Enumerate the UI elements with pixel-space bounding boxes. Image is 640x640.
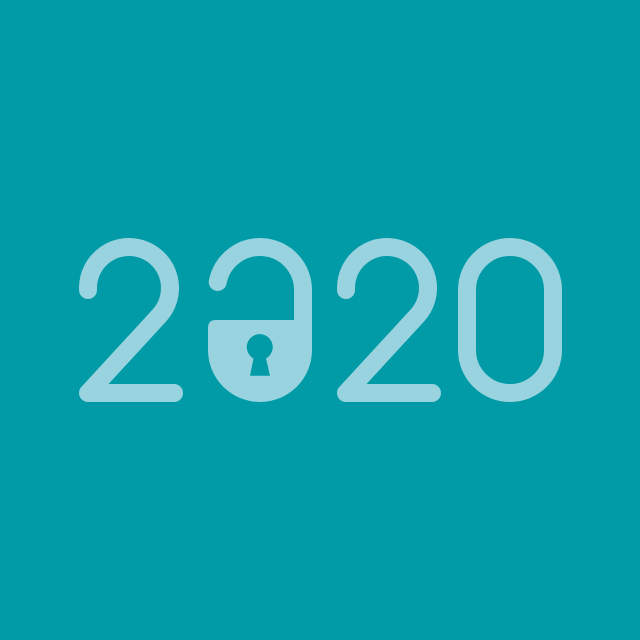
- digit: second 2: [346, 247, 432, 393]
- digit: 0: [467, 247, 553, 393]
- padlock keyhole: [247, 334, 273, 376]
- padlock shackle: [218, 247, 303, 326]
- icon: open padlock as digit 0: [208, 247, 312, 402]
- digit: first 2: [88, 247, 174, 393]
- padlock body: [208, 320, 312, 402]
